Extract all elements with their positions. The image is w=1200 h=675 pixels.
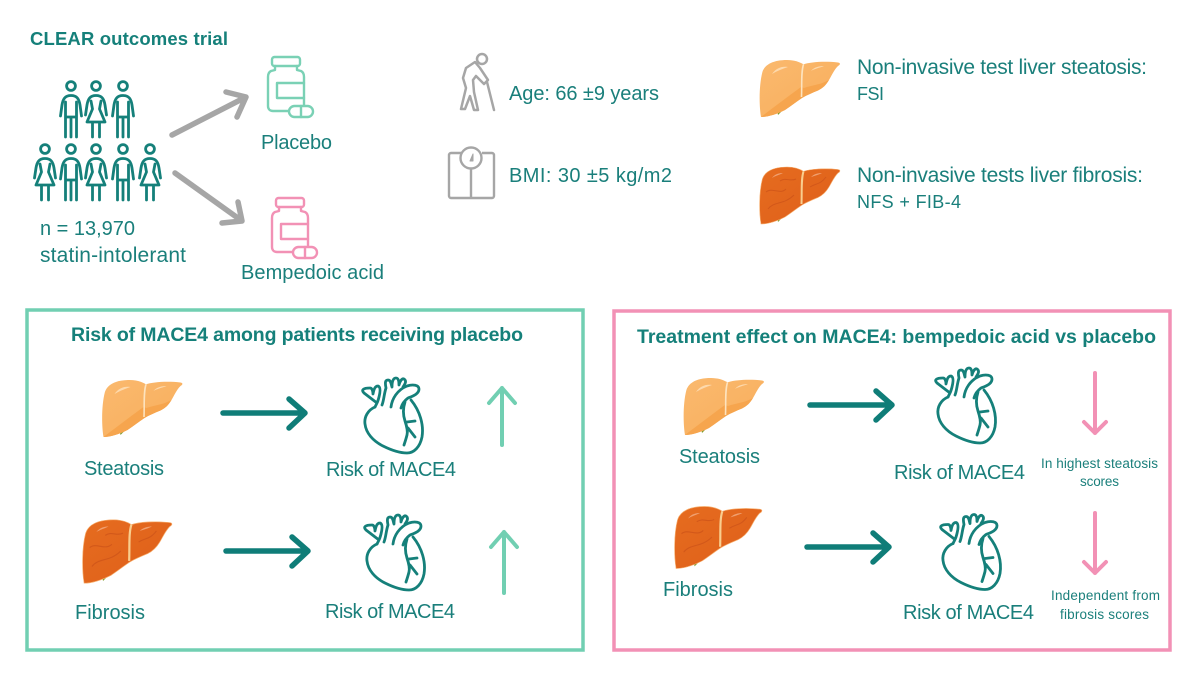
icon: patient group <box>34 82 160 200</box>
icon: heart <box>363 378 423 453</box>
label: risk of MACE4: Risk of MACE4 <box>903 602 1034 624</box>
text: patient count: n = 13,970 <box>40 218 135 240</box>
label: bempedoic acid: Bempedoic acid <box>241 262 384 284</box>
text: patient count: statin-intolerant <box>40 244 186 267</box>
note: independent from fibrosis scores: Independent from <box>1051 588 1160 603</box>
note: highest steatosis scores: In highest steatosis <box>1041 456 1158 471</box>
label: risk of MACE4: Risk of MACE4 <box>894 462 1025 484</box>
arrow: to placebo <box>172 92 246 135</box>
label: risk of MACE4: Risk of MACE4 <box>326 459 456 481</box>
icon: bempedoic acid bottle <box>272 198 317 258</box>
icon: steatosis liver <box>760 60 840 117</box>
text: steatosis test <box>857 56 1147 104</box>
arrow: reduced risk <box>1084 513 1106 573</box>
arrow: fibrosis to risk <box>226 537 308 566</box>
panel heading: Treatment effect on MACE4: bempedoic acid vs placebo <box>637 326 1156 348</box>
panel: risk among placebo patients <box>27 310 583 650</box>
title: CLEAR outcomes trial: CLEAR outcomes trial <box>30 28 228 49</box>
arrow: increased risk <box>489 388 515 445</box>
icon: heart <box>936 368 996 443</box>
icon: elderly person with cane <box>461 54 494 110</box>
icon: steatosis liver <box>102 380 182 437</box>
panel: treatment effect <box>614 311 1170 650</box>
note: independent from fibrosis scores: fibrosis scores <box>1060 607 1149 622</box>
text: fibrosis tests <box>857 164 1143 212</box>
label: placebo: Placebo <box>261 132 332 154</box>
arrow: steatosis to risk <box>810 391 892 420</box>
text: age: Age: 66 ±9 years <box>509 83 659 105</box>
label: steatosis: Steatosis <box>679 446 760 468</box>
text: fibrosis tests: Non-invasive tests liver fibrosis: <box>857 164 1143 187</box>
note: independent from fibrosis scores <box>1051 588 1160 622</box>
arrow: reduced risk <box>1084 373 1106 433</box>
arrow: to bempedoic acid <box>175 173 242 223</box>
icon: fibrosis liver <box>760 167 840 224</box>
text: steatosis test: FSI <box>857 84 884 104</box>
text: BMI: BMI: 30 ±5 kg/m2 <box>509 165 672 187</box>
text: patient count <box>40 218 186 267</box>
icon: fibrosis liver <box>83 520 172 583</box>
note: highest steatosis scores <box>1041 456 1158 489</box>
icon: fibrosis liver <box>675 507 762 568</box>
note: highest steatosis scores: scores <box>1080 474 1119 489</box>
text: fibrosis tests: NFS + FIB-4 <box>857 192 961 212</box>
arrow: steatosis to risk <box>223 399 305 428</box>
panel heading: Risk of MACE4 among patients receiving placebo <box>71 324 523 346</box>
icon: steatosis liver <box>684 378 764 435</box>
arrow: increased risk <box>491 532 517 593</box>
label: risk of MACE4: Risk of MACE4 <box>325 601 455 623</box>
arrow: fibrosis to risk <box>807 533 889 562</box>
label: fibrosis: Fibrosis <box>75 602 145 624</box>
label: steatosis: Steatosis <box>84 458 164 480</box>
icon: placebo bottle <box>268 57 313 117</box>
icon: heart <box>365 515 425 590</box>
label: fibrosis: Fibrosis <box>663 579 733 601</box>
text: steatosis test: Non-invasive test liver steatosis: <box>857 56 1147 79</box>
icon: heart <box>941 514 1001 590</box>
icon: weighing scale <box>449 148 494 198</box>
